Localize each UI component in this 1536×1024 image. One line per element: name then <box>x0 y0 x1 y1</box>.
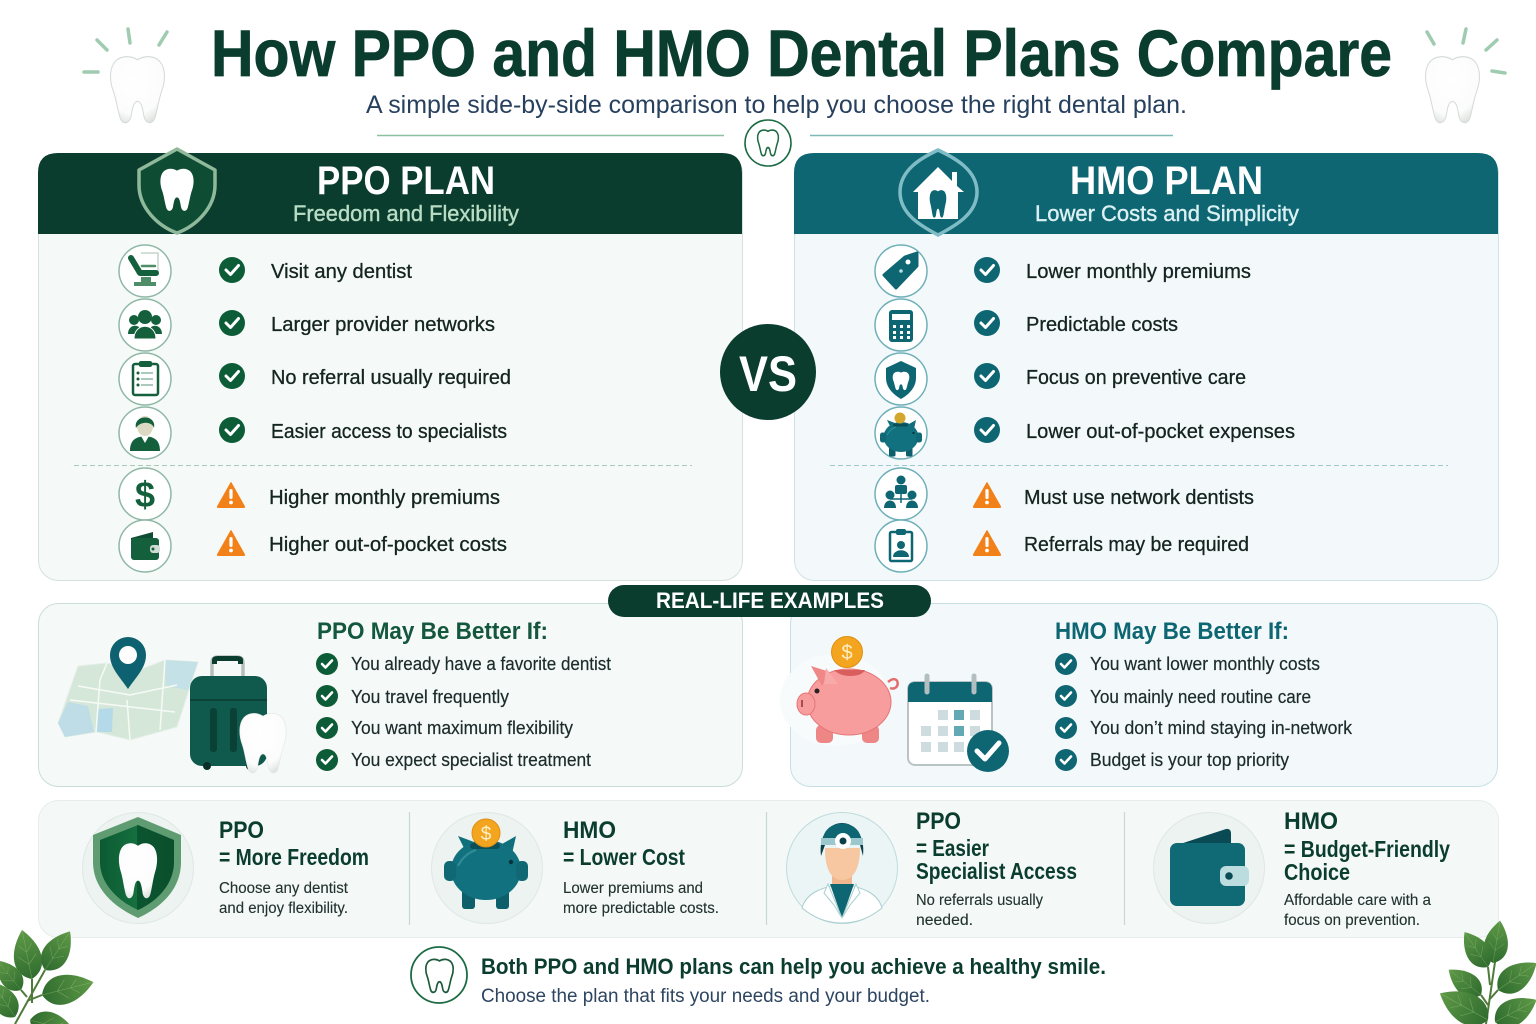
summary: HMO lower cost <box>432 812 719 924</box>
decoration: leaves bottom right <box>1432 919 1536 1024</box>
row: must use network dentists: Must use network dentists <box>1024 487 1254 509</box>
summary: PPO more freedom: and enjoy flexibility. <box>219 900 348 917</box>
subtitle: A simple side-by-side comparison to help you choose the right dental plan. <box>366 91 1187 119</box>
list: PPO examples: You want maximum flexibility <box>351 718 573 738</box>
PPO tagline: Freedom and Flexibility <box>293 201 519 226</box>
list: PPO examples <box>316 653 611 771</box>
row: higher out-of-pocket costs <box>119 520 507 572</box>
footer subtext: Choose the plan that fits your needs and your budget. <box>481 986 930 1007</box>
summary: HMO lower cost: $ <box>481 824 492 845</box>
VS badge <box>720 324 816 420</box>
row: easier access to specialists: Easier access to specialists <box>271 421 507 443</box>
summary: PPO more freedom: PPO <box>219 817 264 844</box>
divider: HMO pros and cons <box>830 464 1448 466</box>
row: lower monthly premiums <box>875 245 1251 297</box>
panel: PPO examples <box>38 604 742 786</box>
summary: PPO easier specialist access: needed. <box>916 912 973 929</box>
summary: PPO easier specialist access: = Easier <box>916 835 989 861</box>
summary: HMO budget-friendly choice: = Budget-Friendly <box>1284 836 1450 862</box>
row: higher monthly premiums: $ <box>135 474 155 515</box>
list: HMO examples: Budget is your top priority <box>1090 750 1289 770</box>
row: larger provider networks <box>119 299 495 351</box>
summary: HMO lower cost: HMO <box>563 817 616 844</box>
footer headline: Both PPO and HMO plans can help you achieve a healthy smile. <box>481 954 1106 979</box>
row: visit any dentist: Visit any dentist <box>271 261 412 283</box>
icon: shining tooth left <box>84 29 167 123</box>
row: higher out-of-pocket costs: Higher out-of-pocket costs <box>269 534 507 556</box>
row: lower out-of-pocket expenses <box>875 407 1295 459</box>
row: focus on preventive care <box>875 353 1246 405</box>
HMO heading: HMO PLAN <box>1070 159 1263 203</box>
section pill: real-life examples: REAL-LIFE EXAMPLES <box>656 588 884 613</box>
row: focus on preventive care: Focus on preventive care <box>1026 367 1246 389</box>
decoration: leaves bottom left <box>0 924 97 1024</box>
row: referrals may be required <box>875 520 1249 572</box>
panel: PPO plan <box>38 149 742 580</box>
illustration: pink piggy bank <box>780 636 898 746</box>
summary: HMO budget-friendly choice: Affordable care with a <box>1284 892 1431 909</box>
summary: HMO budget-friendly choice: Choice <box>1284 859 1350 885</box>
panel: summary band <box>38 800 1498 938</box>
list: PPO examples: You expect specialist treatment <box>351 750 591 770</box>
PPO heading: PPO PLAN <box>317 159 495 203</box>
row: easier access to specialists <box>119 407 507 459</box>
list: HMO examples: You mainly need routine care <box>1090 687 1311 707</box>
row: predictable costs: Predictable costs <box>1026 314 1178 336</box>
illustration: pink piggy bank: $ <box>841 642 853 664</box>
row: no referral usually required: No referral usually required <box>271 367 511 389</box>
summary: HMO lower cost: Lower premiums and <box>563 880 703 897</box>
summary: PPO more freedom: Choose any dentist <box>219 880 349 897</box>
section pill: real-life examples <box>608 585 931 617</box>
row: visit any dentist <box>119 245 412 297</box>
icon: shining tooth right <box>1426 29 1505 123</box>
summary: HMO lower cost: more predictable costs. <box>563 900 719 917</box>
summary: HMO budget-friendly choice <box>1154 808 1450 929</box>
icon: HMO house emblem <box>900 150 977 235</box>
row: must use network dentists <box>875 468 1254 520</box>
illustration: map and pin <box>58 637 198 740</box>
panel: HMO plan <box>794 150 1498 580</box>
HMO examples heading: HMO May Be Better If: <box>1055 618 1289 645</box>
row: larger provider networks: Larger provider networks <box>271 314 495 336</box>
row: higher monthly premiums: Higher monthly premiums <box>269 487 500 509</box>
PPO header bar <box>38 153 742 234</box>
list: HMO examples <box>1055 653 1353 771</box>
row: no referral usually required <box>119 353 511 405</box>
row: lower monthly premiums: Lower monthly premiums <box>1026 261 1251 283</box>
icon: footer tooth badge <box>411 947 467 1003</box>
PPO examples heading: PPO May Be Better If: <box>317 618 548 645</box>
summary: PPO easier specialist access: Specialist Access <box>916 858 1077 884</box>
summary: HMO budget-friendly choice: focus on prevention. <box>1284 912 1420 929</box>
panel: HMO examples <box>780 604 1498 786</box>
icon: PPO shield <box>139 149 215 233</box>
summary: PPO easier specialist access: PPO <box>916 808 961 835</box>
HMO header bar <box>794 153 1498 234</box>
title divider with tooth badge <box>377 120 1173 166</box>
row: predictable costs <box>875 299 1178 351</box>
illustration: calendar with check <box>908 676 1009 772</box>
list: HMO examples: You don’t mind staying in-network <box>1090 718 1353 738</box>
row: referrals may be required: Referrals may be required <box>1024 534 1249 556</box>
summary: HMO budget-friendly choice: HMO <box>1284 808 1338 835</box>
summary: PPO more freedom <box>82 812 369 924</box>
title: How PPO and HMO Dental Plans Compare <box>211 16 1392 90</box>
summary: HMO lower cost: = Lower Cost <box>563 844 685 870</box>
summary: PPO more freedom: = More Freedom <box>219 844 369 870</box>
summary: PPO easier specialist access: No referrals usually <box>916 892 1043 909</box>
divider: PPO pros and cons <box>74 464 692 466</box>
illustration: suitcase and tooth <box>190 656 286 773</box>
row: higher monthly premiums <box>119 468 500 520</box>
list: PPO examples: You already have a favorite dentist <box>351 654 611 674</box>
list: PPO examples: You travel frequently <box>351 687 509 707</box>
summary: PPO easier specialist access <box>786 808 1077 929</box>
row: lower out-of-pocket expenses: Lower out-of-pocket expenses <box>1026 421 1295 443</box>
HMO tagline: Lower Costs and Simplicity <box>1035 201 1299 226</box>
VS badge: VS <box>739 346 797 402</box>
list: HMO examples: You want lower monthly costs <box>1090 654 1320 674</box>
